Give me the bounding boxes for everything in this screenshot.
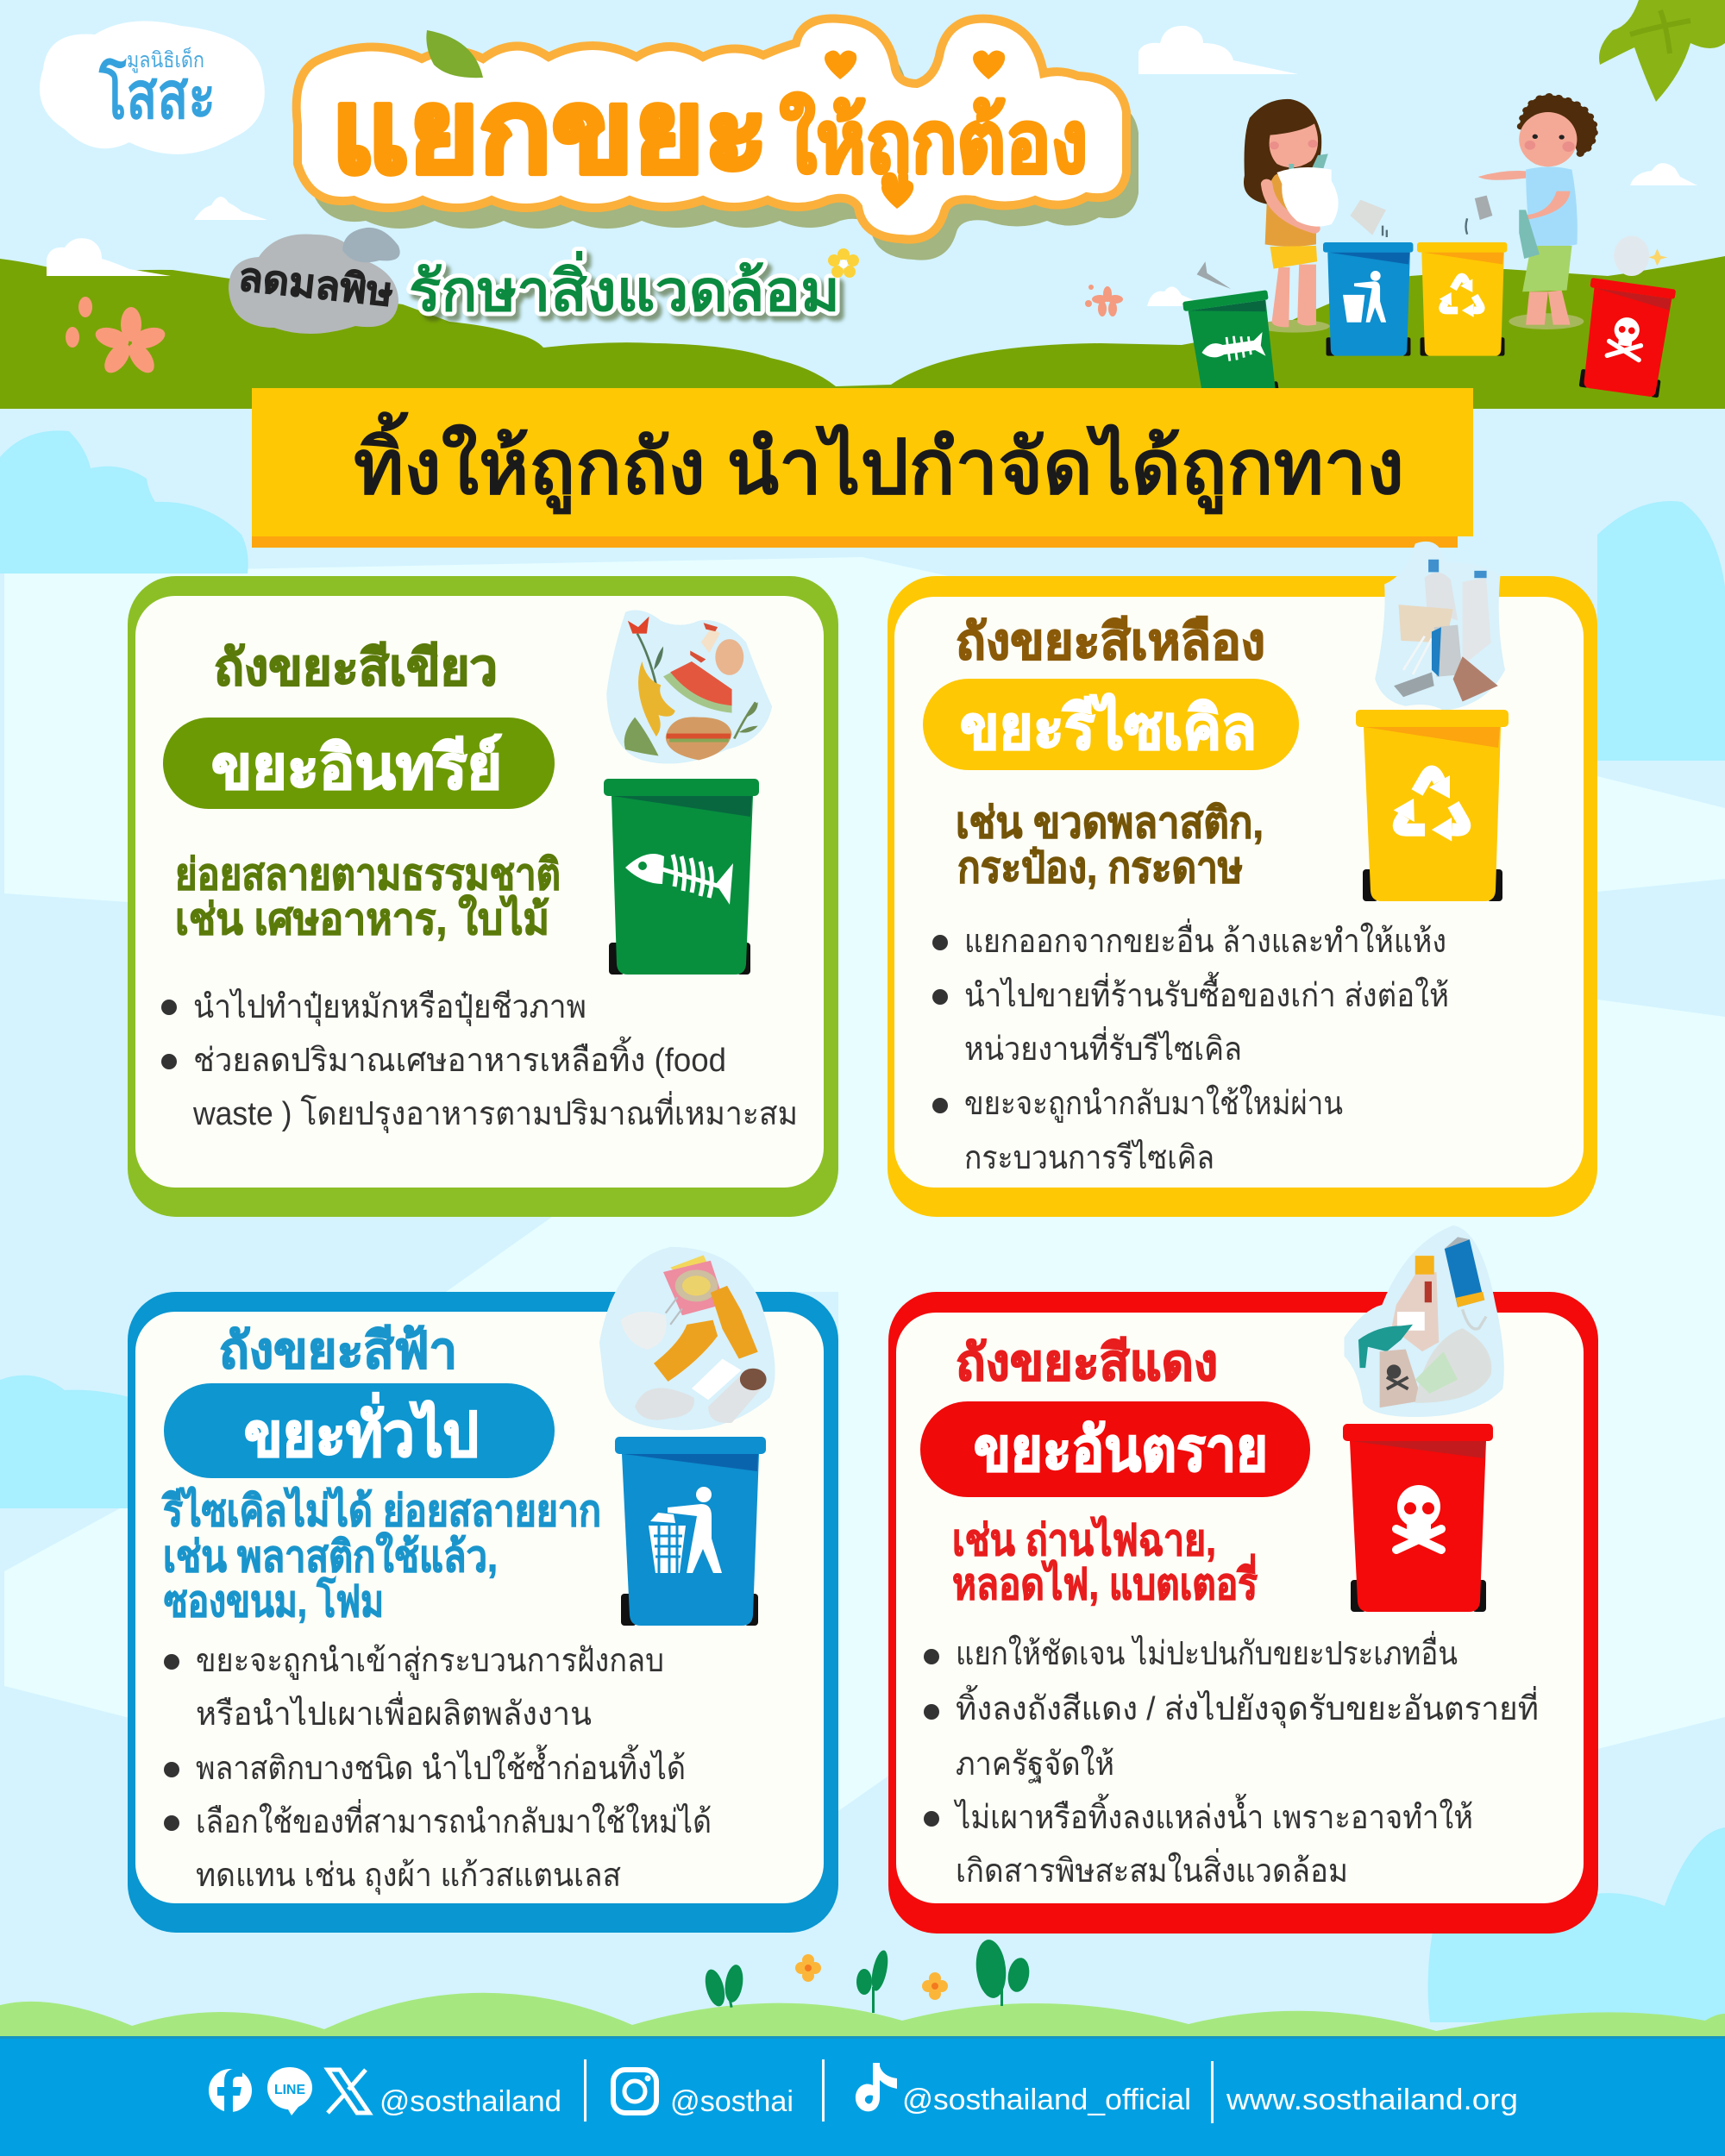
banner text: ทิ้งให้ถูกถัง นำไปกำจัดได้ถูกทาง [354,411,1404,515]
red pill label: ขยะอันตราย [974,1416,1268,1483]
yellow bullets: นำไปขายที่ร้านรับซื้อของเก่า ส่งต่อให้ [964,971,1449,1014]
blue bullets: ขยะจะถูกนำเข้าสู่กระบวนการฝังกลบ [196,1643,664,1680]
subtitle smog cloud [229,228,400,334]
blue bin with person icon [615,1437,766,1626]
seedlings and flowers [702,1938,1032,2013]
icon: yellow flower [828,248,859,278]
yellow bullets: หน่วยงานที่รับรีไซเคิล [964,1026,1242,1068]
red description [952,1515,1258,1608]
red bullets: ไม่เผาหรือทิ้งลงแหล่งน้ำ เพราะอาจทำให้ [953,1793,1473,1836]
icon: hazardous items [1344,1225,1504,1417]
separator [822,2059,825,2122]
icon: line: LINE [274,2083,305,2097]
green bullets [161,988,798,1133]
text: line handle: @sosthailand [380,2085,561,2118]
blue pill label [164,1383,555,1478]
small yellow bin [1417,242,1507,356]
title text: แยกขยะ [331,66,768,197]
panel: yellow bin recyclable waste [888,542,1597,1217]
yellow pill label: ขยะรีไซเคิล [960,693,1257,761]
icon: general waste [599,1247,775,1430]
clouds [47,26,1697,306]
green bullets: waste ) โดยปรุงอาหารตามปริมาณที่เหมาะสม [192,1091,798,1133]
title text: ให้ถูกต้อง [780,92,1088,196]
small green bin [1182,290,1283,411]
red description: หลอดไฟ, แบตเตอรี่ [952,1554,1258,1608]
icon: leaf on title [426,30,483,78]
subtitle: protect the environment: รักษาสิ่งแวดล้อม [409,250,840,323]
yellow bullets: แยกออกจากขยะอื่น ล้างและทำให้แห้ง [964,918,1446,960]
green bin with fish icon [604,779,759,975]
text: tiktok handle: @sosthailand_official [902,2084,1191,2116]
yellow description: เช่น ขวดพลาสติก, [956,799,1264,847]
blue bullets: เลือกใช้ของที่สามารถนำกลับมาใช้ใหม่ได้ [196,1799,712,1840]
icon: line [267,2067,312,2115]
yellow bin with recycle icon [1356,710,1509,901]
yellow heading: ถังขยะสีเหลือง [956,614,1265,670]
icon: x [328,2070,369,2113]
blue bullets [164,1643,712,1895]
blue description: เช่น พลาสติกใช้แล้ว, [163,1532,498,1581]
red bullets [924,1631,1539,1890]
red pill label [920,1401,1310,1497]
green description [175,850,561,943]
yellow description: กระป๋อง, กระดาษ [957,843,1243,892]
children and small bins [1182,95,1676,411]
small orange flower [1085,285,1123,317]
blue description [161,1486,601,1626]
hearts on title [825,50,1005,209]
red bullets: เกิดสารพิษสะสมในสิ่งแวดล้อม [956,1848,1348,1890]
red bullets: ทิ้งลงถังสีแดง / ส่งไปยังจุดรับขยะอันตรายที่ [956,1684,1539,1728]
yellow pill label [923,679,1299,770]
small blue bin [1323,242,1413,356]
footer hills [0,1993,1725,2037]
logo [40,21,265,154]
red description: เช่น ถ่านไฟฉาย, [952,1515,1216,1564]
text: website: www.sosthailand.org [1226,2084,1518,2116]
yellow bullets: กระบวนการรีไซเคิล [964,1139,1214,1176]
icon: facebook [209,2069,252,2112]
red bullets: แยกให้ชัดเจน ไม่ปะปนกับขยะประเภทอื่น [956,1631,1458,1672]
icon: recyclable items [1375,542,1505,711]
small red bin [1576,278,1676,398]
blue pill label: ขยะทั่วไป [244,1392,479,1469]
footer bar [0,2036,1725,2156]
separator [1211,2061,1214,2123]
green pill label [163,718,555,809]
blue bullets: พลาสติกบางชนิด นำไปใช้ซ้ำก่อนทิ้งได้ [196,1744,686,1787]
boy [1478,95,1596,329]
green bullets: นำไปทำปุ๋ยหมักหรือปุ๋ยชีวภาพ [193,988,586,1026]
blue bullets: หรือนำไปเผาเพื่อผลิตพลังงาน [196,1691,592,1733]
panel: green bin organic waste [128,576,838,1217]
icon: tiktok [856,2063,897,2111]
yellow bullets: ขยะจะถูกนำกลับมาใช้ใหม่ผ่าน [964,1085,1343,1123]
title sticker [297,19,1138,260]
blue description: รีไซเคิลไม่ได้ ย่อยสลายยาก [161,1486,601,1535]
red bin with skull icon [1343,1424,1493,1612]
panel: blue bin general waste [128,1247,838,1933]
falling trash [1197,196,1667,289]
green hills [0,256,1725,409]
logo caption: มูลนิธิเด็ก [127,47,204,73]
girl [1244,99,1339,333]
yellow description [956,799,1264,892]
blue heading: ถังขยะสีฟ้า [219,1323,457,1379]
icon: orange flower [66,297,167,378]
girl and boy illustration [1197,95,1667,333]
panel: red bin hazardous waste [888,1225,1598,1934]
icon: food scraps [606,611,772,764]
subtitle: reduce pollution: ลดมลพิษ [236,254,395,315]
leaves top right [1599,0,1725,102]
red heading: ถังขยะสีแดง [956,1335,1218,1391]
text: instagram handle: @sosthai [670,2085,794,2118]
headline banner [252,388,1473,548]
green description: เช่น เศษอาหาร, ใบไม้ [175,894,549,943]
yellow bullets [932,918,1449,1176]
blue bullets: ทดแทน เช่น ถุงผ้า แก้วสแตนเลส [196,1858,621,1895]
logo name: โสสะ [98,57,216,133]
title text [331,66,1088,197]
icon: instagram [613,2070,656,2113]
blue description: ซองขนม, โฟม [164,1576,384,1626]
green bullets: ช่วยลดปริมาณเศษอาหารเหลือทิ้ง (food [193,1036,726,1079]
red bullets: ภาครัฐจัดให้ [956,1745,1114,1783]
green pill label: ขยะอินทรีย์ [211,734,502,801]
green description: ย่อยสลายตามธรรมชาติ [175,850,561,899]
green heading: ถังขยะสีเขียว [214,640,498,696]
separator [584,2059,586,2122]
